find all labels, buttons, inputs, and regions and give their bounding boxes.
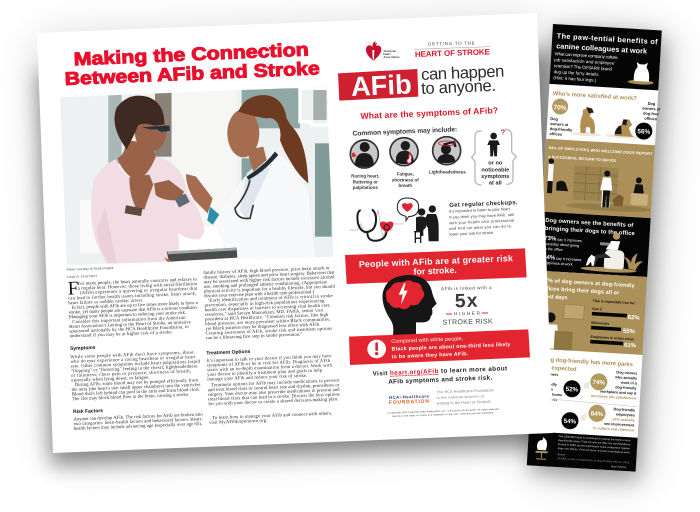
text: get regular checkups: If you think you may have AFib, talk (449, 213, 514, 220)
article column 2: resources," said Steven Manoukian, MD, FAHA, senior vice (205, 308, 323, 318)
section: who's more satisfied: offices (549, 131, 562, 137)
banner: awareness disparity: to be aware they have AFib. (391, 351, 469, 360)
article column 2: symptoms of AFib or be at risk for AFib. Diagnosis of AFib (207, 359, 331, 369)
section: black benefits of bringing dogs: Dog owners see the benefits of (545, 218, 633, 229)
section: black footer: The CESAR® brand is committed to making the world a more (558, 435, 631, 442)
sheet background (37, 13, 553, 453)
banner: greater risk for stroke: for stroke. (413, 265, 457, 277)
section: white more parks than expected: dog-friendly (615, 385, 638, 391)
section: black footer: dogs into offices. Find out more at Cesar.com/dogs-at-work (558, 447, 631, 454)
panel: stroke risk poster bottom (345, 248, 530, 418)
article column 1: stroke, yet many people are unaware that AFib is a serious condition. (69, 306, 198, 316)
section: white more parks than expected: Dog-friendly (613, 407, 636, 413)
section: white more parks than expected: 52% (566, 386, 579, 394)
headline: can happen to anyone: can happen (421, 62, 505, 84)
article column 1: Symptoms (70, 345, 96, 352)
article column 1 (67, 270, 204, 432)
caption: fluttering or (353, 179, 378, 184)
section: white more parks than expected: employees (616, 412, 635, 418)
logo: HCA Healthcare Foundation: FOUNDATION (389, 399, 429, 406)
text: get regular checkups: lower your risk for stroke. (449, 231, 494, 237)
stat: 5x higher stroke risk: STROKE RISK (443, 318, 493, 327)
article column 1: While some people with AFib don't have symptoms, those (70, 351, 194, 360)
logo: American Heart Association: Heart (383, 52, 391, 56)
section: tan dog owners bring dogs with bars: This is especially true for: (593, 299, 636, 305)
icon: stethoscope with heart (349, 209, 403, 241)
article column 1: understand if you may be at higher risk of a stroke. (69, 330, 173, 339)
section: white more parks than expected: 84% (591, 410, 604, 418)
panel: canine colleagues infographic sheet (527, 24, 666, 472)
section: white more parks than expected: 74% (592, 379, 606, 387)
section: who's more satisfied: 70% (553, 104, 567, 112)
section: black footer: dog-friendly place. Find out why we offer the top Workplace (558, 439, 631, 446)
article column 2: your doctor to identify a treatment plan and goals to help (207, 368, 323, 378)
drop cap: F (67, 278, 79, 300)
article column 2: "Early identification and treatment of AFib is critical to stroke (208, 294, 333, 304)
section: white more parks than expected: at a (544, 377, 551, 382)
section: black header: job satisfaction and employee (553, 57, 615, 66)
section: black footer (527, 431, 638, 472)
callout: no noticeable symptoms: at all (489, 181, 502, 187)
section: white more parks than expected: office (543, 387, 553, 392)
section: white more parks than expected: from home (543, 392, 562, 397)
article column 2: and treat blood clots or control heart rate and rhythm, procedures or (208, 383, 340, 393)
banner: awareness disparity (349, 329, 530, 365)
section: white more parks than expected: 54% (564, 418, 577, 426)
panel: AFib symptoms poster top (338, 41, 518, 243)
article column 1: The clot may block blood flow to the brain, causing a stroke. (72, 393, 189, 402)
logo: American Heart Association (366, 41, 400, 61)
caption: Lightheadedness (429, 170, 466, 175)
icon: fatigue symptom (390, 138, 419, 188)
article column 2: It's important to talk to your doctor if you think you may have (207, 354, 332, 364)
icon: lightheadedness symptom (429, 137, 466, 175)
caption: breath (398, 183, 412, 188)
section: who's more satisfied: Who's more satisfied at work? (553, 91, 637, 102)
article column 1: especially when lying down; or fatigue. (71, 376, 150, 384)
section: white more parks than expected (531, 357, 640, 433)
text: copyright: © Copyright 2021 American Heart Association, Inc., a 501(c)(3) not-for-profit. All rights reserved. (387, 408, 500, 415)
article column 2: physical activity is important for a healthy lifestyle, but you should (204, 285, 336, 295)
text: sponsor note: The HCA Healthcare Foundation (437, 388, 494, 394)
section: who's more satisfied: owners at (642, 105, 661, 112)
section: white more parks than expected: Dog owners (616, 370, 638, 376)
section: white more parks than expected: workplace and say it (599, 389, 637, 396)
article column 2: To learn how to manage your AFib and connect with others, (212, 411, 332, 421)
stat: 5x higher stroke risk: 5x (455, 291, 478, 312)
logo: American Heart Association: American (383, 49, 396, 53)
callout: no noticeable symptoms: or no (488, 161, 503, 167)
section: white more parks than expected: who actually (614, 375, 638, 381)
article column 1: two categories: heart-health factors and behavioral factors. Heart- (74, 417, 203, 427)
article column 1: Anyone can develop AFib. The risk factors for AFib are broken into (73, 413, 203, 423)
section: tan return to office (542, 139, 655, 218)
section: tan dog owners bring dogs with bars: offices bring their dogs all or (541, 286, 620, 296)
caption: Fatigue, (397, 172, 414, 177)
banner: greater risk for stroke: People with AFib are at greater risk (359, 253, 513, 269)
stat: 5x higher stroke risk: HIGHER (454, 311, 481, 316)
text: visit heart.org: Visit heart.org/AFib to learn more about (372, 365, 508, 378)
section: who's more satisfied: Dog (648, 101, 656, 106)
text: sponsor note: Getting to the Heart of Stroke®. (437, 400, 492, 406)
article column 1: Heart Association's Getting to the Heart of Stroke, an initiative (69, 320, 191, 330)
section: black benefits of bringing dogs (538, 212, 651, 277)
section: white more parks than expected: in culture and retention (593, 426, 635, 433)
text: copyright (387, 408, 500, 418)
article column 1: or faintness; chest pain or pressure; shortness of breath, (71, 369, 191, 379)
article column 1: Blood that's left behind can pool in the atria and form blood clots. (72, 388, 200, 398)
section: who's more satisfied: dog-free (643, 111, 660, 116)
section: tan dog owners bring dogs with bars: 57% of dog owners at dog-friendly (542, 278, 635, 289)
section: black footer: Source: (557, 453, 566, 457)
logo: Getting to the Heart of Stroke (415, 41, 491, 59)
callout: no noticeable symptoms (472, 128, 516, 187)
section: black header (549, 24, 662, 90)
section: white more parks than expected: friendly (544, 382, 558, 387)
article column 1: For many people, the heart naturally contracts and relaxes to (77, 277, 198, 287)
text: visit heart.org: AFib symptoms and stroke risk. (388, 374, 493, 386)
title: Making the Connection (73, 40, 309, 70)
article column 2: blood pressure, are more prevalent within Black communities, (205, 317, 330, 327)
article column 1: FAMILY FEATURES (67, 274, 98, 279)
article column 2: Creating awareness of AFib, stroke risk and treatment options (206, 327, 332, 337)
text: get regular checkups: with your health care professional (449, 219, 514, 225)
article column 1: Managing your AFib is important to reducing your stroke risk. (69, 311, 186, 320)
article column 2: may be associated with higher risk factors include excessive alcohol (204, 275, 335, 285)
icon: patient and doctor checkup (397, 198, 439, 243)
article column 1: Consider this important information from the American (72, 316, 186, 325)
article column 2: manage your AFib and reduce your risk of stroke. (207, 374, 307, 383)
article column 2: visit MyAFibExperience.org. (209, 419, 267, 426)
section: white more parks than expected: Being dog-friendly has more parks (538, 357, 633, 368)
article column 1: In fact, people with AFib are up to five times more likely to have a (72, 301, 198, 311)
article column 2: prevention, especially in high-risk populations experiencing (204, 299, 325, 309)
article column 1: the atria (the heart's two small upper chambers) into the ventricles. (72, 383, 202, 393)
article column 2: treat blood clots that can lead to a stroke. Discuss the best options (208, 393, 340, 403)
article column 2: discuss your exercise plan with a health care professional.) (204, 290, 315, 299)
callout: no noticeable symptoms: ? (501, 128, 506, 137)
section: tan dog owners bring dogs with bars (534, 271, 647, 355)
section: black benefits of bringing dogs: everyday about going (544, 242, 579, 248)
stat: 5x higher stroke risk: AFib is linked with a (441, 285, 492, 291)
article column 2: health care disparities or barriers to accessing vital health care (205, 304, 330, 313)
panel: main article sheet (37, 13, 553, 453)
banner: greater risk for stroke (345, 248, 527, 284)
article column 2: starts with an in-depth examination from a doctor. Work with (207, 363, 333, 373)
text: get regular checkups: Get regular checkups. (449, 200, 518, 209)
section: white more parks than expected: increases job satisfaction (591, 394, 637, 401)
section: who's more satisfied (549, 91, 662, 142)
article column 1: Risk Factors (73, 408, 103, 415)
article column 2: use, smoking and prolonged athletic conditioning. (Appropriate (204, 280, 327, 290)
text: get regular checkups (449, 200, 518, 237)
section: black footer: Mars Petcare (611, 464, 627, 469)
article column 1: sponsored nationally by the HCA Healthcare Foundation, to (69, 325, 189, 335)
section: black header: dug up the furry details. (554, 69, 600, 77)
section: tan dog owners bring dogs with bars: 61% (624, 343, 637, 350)
text: sponsor note: is the national sponsor of (437, 394, 485, 400)
doctor (236, 154, 314, 260)
article column 2: yet Black patients may be diagnosed less often with AFib. (205, 323, 320, 332)
text: sponsor note (437, 388, 494, 406)
section: black benefits of bringing dogs: 14% (543, 255, 556, 262)
callout: no noticeable symptoms: noticeable (481, 167, 509, 173)
article column 2: president at HCA Healthcare. "Common risk factors, like high (205, 313, 329, 323)
heading: what are the symptoms: What are the symptoms of AFib? (360, 105, 498, 121)
photo: patient and doctor (57, 83, 337, 270)
section: tan dog owners bring dogs with bars: Employees in urban areas (590, 335, 634, 341)
section: tan dog owners bring dogs with bars: Gen Z (592, 307, 603, 311)
callout: no noticeable symptoms: symptoms (481, 174, 509, 180)
article column 1: who do may experience a racing heartbeat or irregular heart (70, 355, 196, 365)
text: visit heart.org (372, 365, 508, 386)
section: black header: canine colleagues at work (556, 41, 648, 56)
section: black footer: CESAR survey of employees at dog-friendly offices, 2022 (557, 457, 630, 464)
banner: awareness disparity: Black people are about one-third less likely (391, 342, 510, 353)
text: copyright: Getting to the Heart of Stroke is a trademark of the AHA. Unauthorized use prohibited. (392, 411, 494, 418)
logo: American Heart Association: Association. (383, 55, 400, 59)
icon: racing heart symptom (350, 140, 380, 190)
article column 2: Treatment options for AFib may include medications to prevent (211, 378, 340, 388)
text: get regular checkups: and find out what you can do to (449, 224, 511, 231)
section: white more parks than expected: who actually (611, 417, 636, 423)
section: who's more satisfied: 56% (637, 128, 651, 136)
section: white more parks than expected: Dog owners (537, 372, 558, 377)
section: who's more satisfied: dog-friendly (550, 126, 573, 132)
icon: head with stroke bolt (382, 275, 437, 337)
section: black header: retention? The CESAR® brand (554, 63, 613, 72)
section: white more parks than expected: than expected (537, 365, 577, 373)
section: black benefits of bringing dogs: 73% (544, 236, 557, 243)
section: black footer: Grants in 2022 across businesses make companies happier (558, 443, 630, 450)
title (64, 40, 320, 90)
section: who's more satisfied: Dog (550, 116, 559, 121)
section: tan dog owners bring dogs with bars: Millennials (591, 321, 609, 326)
section: black header: What can improve company culture, (555, 51, 619, 60)
article column 1: rate. Other common symptoms include heart palpitations (rapid (71, 360, 201, 370)
article column 1: health factors may include advancing age (especially over age 65), (74, 422, 202, 432)
section: tan return to office: 84% OF EMPLOYEES WHO WELCOME DOGS REPORT (549, 146, 653, 156)
article column 2: surgery. Your doctor may also prescribe medications to prevent and (208, 388, 340, 398)
headline: can happen to anyone: to anyone. (421, 76, 496, 98)
caption: palpitations (353, 185, 378, 190)
stat: 5x higher stroke risk (441, 285, 493, 327)
article column 1: (AFib) experience a quivering or irregular heartbeat that (80, 287, 198, 296)
section: who's more satisfied: offices (644, 116, 657, 121)
caption: Racing heart, (351, 174, 380, 179)
caption: shortness of (392, 177, 419, 182)
article column 1: "flopping" or "fluttering" feeling in the chest); lightheadedness (71, 364, 198, 374)
title: Between AFib and Stroke (64, 59, 320, 90)
text: get regular checkups: It's important to listen to your heart. (449, 207, 511, 214)
article column 2: can be a lifesaving first step in stroke prevention." (206, 333, 303, 341)
section: black header: The paw-tential benefits of (557, 31, 658, 46)
article column 2: Treatment Options (206, 349, 251, 357)
section: tan return to office: A SUCCESSFUL RETURN TO OFFICE (548, 155, 617, 163)
logo: HCA Healthcare Foundation: HCA+Healthcare (389, 394, 430, 400)
photo credit: Photo courtesy of Getty Images (67, 266, 114, 272)
logo: HCA Healthcare Foundation (389, 394, 430, 406)
section: black benefits of bringing dogs: happiness at work (543, 261, 573, 267)
article column 1: During AFib, some blood may not be pumped efficiently from (75, 378, 199, 388)
section: who's more satisfied: owners at (550, 121, 569, 127)
headline: can happen to anyone (421, 62, 505, 98)
section: white more parks than expected: gardens (543, 397, 557, 402)
section: black benefits of bringing dogs: bringing their dogs to the office (545, 226, 636, 237)
section: black benefits of bringing dogs: to the office (544, 247, 563, 252)
section: tan dog owners bring dogs with bars: 55% (623, 329, 636, 335)
AFib red box: AFib (350, 68, 412, 102)
section: black benefits of bringing dogs: say it increases (556, 257, 582, 262)
article column 2: family history of AFib, high blood pressure, prior heart attack or (203, 266, 330, 276)
section: white more parks than expected: work in a (620, 381, 638, 386)
section: tan dog owners bring dogs with bars: most days (541, 294, 568, 301)
article column 2 (203, 266, 341, 426)
article column 1: can lead to further health issues including stroke, heart attack, (68, 292, 196, 302)
logo: Getting to the Heart of Stroke: GETTING TO THE (428, 41, 475, 46)
sheet background (527, 24, 662, 472)
banner: awareness disparity: Compared with white people, (391, 336, 463, 345)
section: black benefits of bringing dogs: say it improves (557, 238, 582, 243)
section: white more parks than expected: see improvement (604, 422, 635, 428)
logo: Getting to the Heart of Stroke: HEART OF STROKE (415, 47, 491, 59)
article column 2: for you with your doctor to create a shared decision-making plan. (208, 397, 338, 407)
section: tan dog owners bring dogs with bars: 62% (628, 315, 641, 322)
section: black header: (Hint: it has four legs.) (553, 75, 597, 83)
article column 1: heart failure or sudden cardiac arrest. (68, 298, 143, 306)
article column 2: disease, diabetes, sleep apnea and prior heart surgery. Behaviors that (203, 271, 335, 281)
patient (91, 156, 204, 265)
article column 1: a regular beat. However, those living with atrial fibrillation (78, 282, 198, 292)
subheading: common symptoms: Common symptoms may include: (352, 126, 457, 138)
